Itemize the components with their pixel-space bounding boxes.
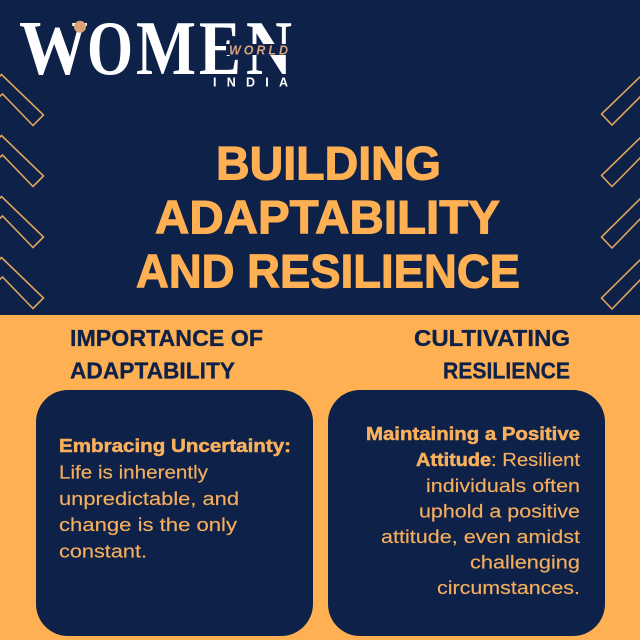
- panel: maintaining a positive attitude: [328, 390, 605, 636]
- logo: Women World India: M: [136, 5, 196, 91]
- logo: Women World India: WORLD: [229, 44, 288, 58]
- text block: embracing uncertainty: [59, 435, 291, 562]
- logo: Women World India: N: [246, 5, 292, 91]
- logo: Women World India: O: [87, 5, 133, 91]
- heading: importance of adaptability: IMPORTANCE OF: [70, 325, 263, 351]
- left chevrons: [0, 74, 44, 308]
- right chevrons: [602, 75, 640, 309]
- text block: maintaining a positive attitude: : Resilient: [491, 449, 580, 470]
- text block: embracing uncertainty: unpredictable, and: [59, 488, 239, 509]
- logo: Women World India: INDIA: [213, 76, 288, 90]
- title: BUILDING: [216, 138, 441, 190]
- header panel: [0, 0, 640, 315]
- heading: cultivating resilience: RESILIENCE: [443, 358, 570, 384]
- text block: maintaining a positive attitude: Attitude: [416, 449, 491, 470]
- heading: importance of adaptability: ADAPTABILITY: [70, 358, 235, 384]
- heading: cultivating resilience: [414, 325, 570, 384]
- logo: Women World India: [19, 5, 292, 91]
- text block: maintaining a positive attitude: Maintaining a Positive: [366, 423, 580, 444]
- text block: embracing uncertainty: Embracing Uncertainty:: [59, 435, 291, 456]
- logo: Women World India: E: [199, 5, 241, 91]
- text block: maintaining a positive attitude: uphold a positive: [419, 500, 580, 522]
- text block: maintaining a positive attitude: attitude, even amidst: [381, 526, 580, 547]
- title: ADAPTABILITY: [155, 192, 500, 244]
- heading: cultivating resilience: CULTIVATING: [414, 325, 570, 351]
- text block: embracing uncertainty: change is the only: [59, 514, 238, 535]
- panel: embracing uncertainty: [36, 390, 313, 636]
- text block: maintaining a positive attitude: individuals often: [426, 475, 580, 496]
- text block: maintaining a positive attitude: [366, 423, 580, 598]
- logo: Women World India: W: [19, 5, 88, 91]
- text block: embracing uncertainty: Life is inherently: [59, 462, 209, 482]
- title: AND RESILIENCE: [136, 246, 520, 298]
- text block: maintaining a positive attitude: circumstances.: [437, 577, 580, 598]
- heading: importance of adaptability: [70, 325, 263, 384]
- text block: maintaining a positive attitude: challenging: [470, 552, 580, 572]
- title: [136, 138, 520, 298]
- text block: embracing uncertainty: constant.: [59, 540, 147, 562]
